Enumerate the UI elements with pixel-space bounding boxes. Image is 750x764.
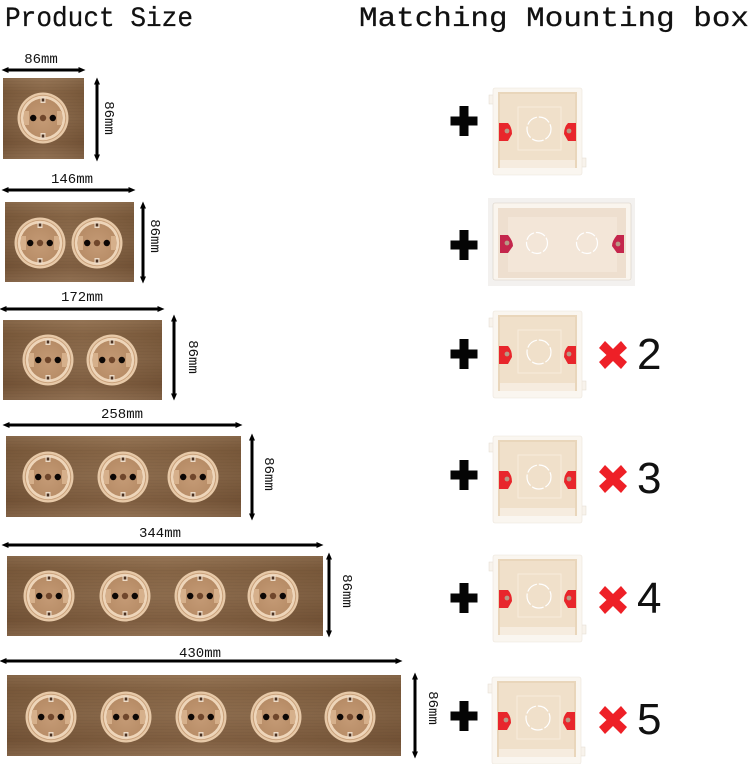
- icon: plus: [450, 230, 478, 260]
- panel with three sockets: [6, 436, 241, 517]
- panel with five sockets: [7, 675, 401, 756]
- mounting box single: [489, 88, 586, 175]
- height dimension 86mm: [329, 556, 354, 634]
- height dimension 86mm: [143, 205, 162, 280]
- width dimension 344mm: 344mm: [139, 526, 181, 542]
- height dimension 86mm: 86mm: [338, 574, 354, 608]
- icon: plus: [450, 339, 478, 369]
- mounting box: [489, 436, 586, 523]
- multiplier: times 2: 2: [637, 330, 661, 379]
- heading: Matching Mounting box: Matching Mounting box: [359, 4, 749, 35]
- mounting box: [488, 677, 585, 764]
- width dimension 172mm: 172mm: [61, 290, 103, 306]
- width dimension 86mm: 86mm: [24, 52, 58, 68]
- width dimension 146mm: [5, 172, 132, 190]
- height dimension 86mm: 86mm: [100, 101, 116, 135]
- row 3: double socket 172mm: [3, 290, 661, 400]
- height dimension 86mm: 86mm: [424, 691, 440, 725]
- height dimension 86mm: 86mm: [146, 219, 162, 253]
- multiplier: times 2: [599, 330, 661, 379]
- height dimension 86mm: [174, 318, 200, 397]
- height dimension 86mm: 86mm: [260, 457, 276, 491]
- mounting box: [489, 555, 586, 642]
- row 4: triple socket 258mm: [6, 407, 661, 523]
- height dimension 86mm: [252, 437, 276, 517]
- row 1: single socket 86mm: [3, 52, 586, 175]
- icon: plus: [450, 701, 478, 731]
- panel with two sockets: [3, 320, 162, 400]
- height dimension 86mm: [415, 676, 440, 755]
- heading: Product Size: Product Size: [5, 4, 193, 35]
- multiplier: times 4: 4: [637, 574, 661, 623]
- multiplier: times 3: 3: [637, 454, 661, 503]
- width dimension 146mm: 146mm: [51, 172, 93, 188]
- width dimension 258mm: 258mm: [101, 407, 143, 423]
- height dimension 86mm: 86mm: [184, 340, 200, 374]
- icon: plus: [450, 583, 478, 613]
- icon: plus: [450, 106, 478, 136]
- row 5: four sockets 344mm: [5, 526, 661, 642]
- multiplier: times 5: [599, 695, 661, 744]
- mounting box: [489, 311, 586, 398]
- multiplier: times 3: [599, 454, 661, 503]
- panel with one socket: [3, 78, 84, 159]
- row 6: five sockets 430mm: [3, 646, 661, 764]
- mounting box double: [488, 198, 635, 286]
- panel with two sockets: [5, 202, 134, 282]
- width dimension 86mm: [5, 52, 82, 70]
- width dimension 430mm: 430mm: [179, 646, 221, 662]
- multiplier: times 5: 5: [637, 695, 661, 744]
- height dimension 86mm: [97, 81, 116, 158]
- multiplier: times 4: [599, 574, 661, 623]
- row 2: double socket 146mm: [5, 172, 635, 286]
- icon: plus: [450, 460, 478, 490]
- panel with four sockets: [7, 556, 323, 636]
